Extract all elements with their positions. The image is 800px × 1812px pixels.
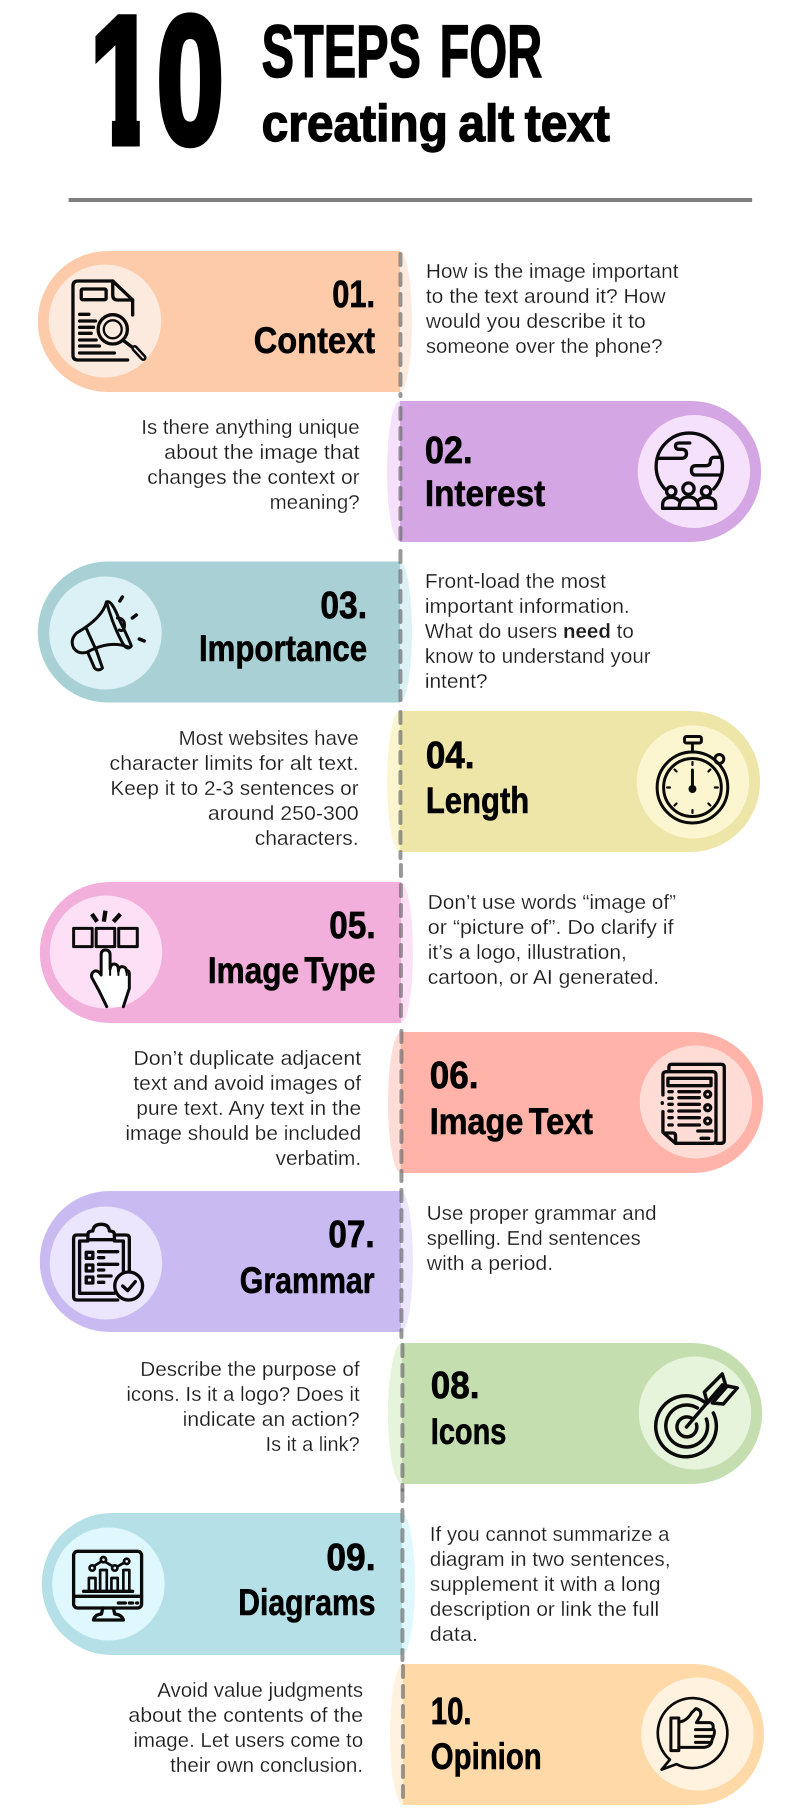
description: 03: What do users need to — [425, 621, 634, 643]
description: 02: Is there anything unique — [141, 417, 360, 439]
description: 06: pure text. Any text in the — [136, 1098, 361, 1120]
description: 07: with a period. — [426, 1253, 553, 1275]
description: 03: intent? — [425, 671, 488, 693]
panel: step 01 Context — [38, 251, 679, 392]
number: 02: 02. — [425, 430, 473, 472]
description: 09 — [430, 1524, 671, 1646]
description: 04 — [109, 728, 359, 850]
icon: stopwatch — [657, 736, 728, 823]
pill: 06 — [401, 1032, 763, 1173]
description: 05 — [428, 892, 676, 989]
panel: step 08 Icons — [126, 1343, 762, 1484]
panel: step 05 Image Type — [40, 882, 676, 1023]
icon: monitor with chart — [74, 1551, 142, 1620]
heading: Diagrams: Diagrams — [238, 1582, 376, 1623]
description: 06: text and avoid images of — [133, 1073, 362, 1095]
description: 02: about the image that — [164, 442, 360, 464]
icon badge: 10 — [641, 1678, 754, 1790]
description: 10: about the contents of the — [128, 1705, 363, 1727]
pill: 05 — [40, 882, 401, 1023]
timeline: dashed centre line — [400, 254, 403, 1802]
pill edge: 06 — [388, 1032, 414, 1173]
description: 02: meaning? — [270, 492, 360, 514]
icon: target and arrow — [656, 1374, 737, 1457]
number: 04: 04. — [426, 735, 475, 777]
description: 05: Don’t use words “image of” — [428, 892, 676, 914]
panel: step 07 Grammar — [40, 1191, 657, 1332]
icon badge: 09 — [52, 1528, 165, 1640]
description: 08 — [126, 1359, 360, 1456]
icon: thumbs up speech bubble — [658, 1698, 727, 1770]
pill edge: 07 — [389, 1191, 413, 1332]
icon badge: 05 — [50, 896, 162, 1008]
heading: Image Type: Image Type — [208, 950, 376, 991]
number: 05: 05. — [329, 905, 376, 947]
description: 03: important information. — [425, 596, 630, 618]
pill edge: 10 — [390, 1664, 416, 1805]
description: 01: to the text around it? How — [426, 286, 666, 308]
icon badge: 06 — [640, 1046, 752, 1158]
heading: Importance: Importance — [199, 628, 367, 669]
description: 07: Use proper grammar and — [427, 1203, 657, 1225]
pill edge: 02 — [387, 401, 413, 542]
heading: Grammar: Grammar — [240, 1260, 375, 1301]
heading: Length: Length — [426, 780, 529, 821]
description: 04: characters. — [255, 828, 359, 850]
description: 06 — [125, 1048, 362, 1170]
heading: Context: Context — [254, 320, 375, 361]
description: 08: Describe the purpose of — [140, 1359, 360, 1381]
description: 09: description or link the full — [430, 1599, 659, 1621]
icon: clipboard with check — [74, 1224, 143, 1300]
description: 06: image should be included — [125, 1123, 361, 1145]
pill: 04 — [400, 711, 760, 852]
panel: step 10 Opinion — [128, 1664, 764, 1805]
icon badge: 04 — [637, 726, 749, 838]
description: 01: would you describe it to — [425, 311, 646, 333]
description: 07: spelling. End sentences — [427, 1228, 641, 1250]
description: 10 — [128, 1680, 363, 1777]
description: 10: Avoid value judgments — [157, 1680, 363, 1702]
pill: 02 — [400, 401, 761, 542]
panel: step 09 Diagrams — [42, 1513, 671, 1655]
title — [84, 0, 610, 182]
description: 10: their own conclusion. — [170, 1755, 363, 1777]
number: 06: 06. — [430, 1055, 479, 1097]
panel: step 03 Importance — [38, 562, 651, 702]
panel: step 06 Image Text — [125, 1032, 763, 1173]
description: 06: verbatim. — [276, 1148, 361, 1170]
description: 07 — [426, 1203, 657, 1275]
icon: stacked documents — [662, 1064, 724, 1143]
icon badge: 08 — [639, 1356, 751, 1470]
description: 09: data. — [430, 1624, 478, 1646]
description: 01: How is the image important — [426, 261, 679, 283]
pill edge: 03 — [388, 562, 412, 702]
description: 10: image. Let users come to — [133, 1730, 363, 1752]
title line: creating alt text: creating alt text — [262, 94, 610, 152]
description: 06: Don’t duplicate adjacent — [133, 1048, 362, 1070]
description: 08: indicate an action? — [183, 1409, 360, 1431]
icon badge: 01 — [49, 264, 161, 378]
panel: step 04 Length — [109, 711, 760, 852]
description: 04: Keep it to 2-3 sentences or — [110, 778, 359, 800]
description: 09: diagram in two sentences, — [430, 1549, 671, 1571]
pill edge: 05 — [389, 882, 413, 1023]
icon: globe and audience — [656, 433, 722, 508]
icon badge: 02 — [638, 415, 750, 528]
heading: Interest: Interest — [425, 473, 545, 514]
pill: 08 — [402, 1343, 762, 1484]
description: 05: or “picture of”. Do clarify if — [428, 917, 674, 939]
pill: 01 — [38, 251, 400, 392]
description: 09: supplement it with a long — [430, 1574, 661, 1596]
description: 02 — [141, 417, 360, 514]
description: 08: icons. Is it a logo? Does it — [126, 1384, 360, 1406]
description: 03: know to understand your — [425, 646, 651, 668]
description: 01: someone over the phone? — [426, 336, 663, 358]
icon: pointing hand and squares — [74, 911, 137, 1007]
pill: 03 — [38, 562, 400, 702]
pill edge: 09 — [389, 1513, 415, 1655]
pill: 07 — [40, 1191, 401, 1332]
description: 09: If you cannot summarize a — [430, 1524, 670, 1546]
description: 05: cartoon, or AI generated. — [428, 967, 659, 989]
heading: Opinion: Opinion — [431, 1736, 542, 1777]
description: 05: it’s a logo, illustration, — [428, 942, 627, 964]
title line: STEPS FOR: STEPS FOR — [262, 10, 542, 93]
icon badge: 03 — [49, 576, 162, 690]
icon badge: 07 — [50, 1206, 162, 1320]
description: 02: changes the context or — [147, 467, 360, 489]
pill edge: 08 — [388, 1343, 416, 1484]
description: 08: Is it a link? — [266, 1434, 360, 1456]
pill: 09 — [42, 1513, 402, 1655]
number: 09: 09. — [326, 1537, 376, 1579]
pill edge: 04 — [387, 711, 413, 852]
panel: step 02 Interest — [141, 401, 761, 542]
description: 03 — [425, 571, 651, 693]
icon: document with magnifier — [73, 281, 143, 360]
description: 04: around 250-300 — [208, 803, 359, 825]
icon: megaphone — [72, 597, 144, 670]
number: 08: 08. — [431, 1365, 480, 1407]
number: 03: 03. — [320, 585, 367, 627]
heading: Image Text: Image Text — [430, 1101, 593, 1142]
number: 10: 10. — [431, 1691, 472, 1733]
pill: 10 — [403, 1664, 764, 1805]
heading: Icons: Icons — [431, 1411, 506, 1452]
description: 03: Front-load the most — [425, 571, 606, 593]
pill edge: 01 — [388, 251, 412, 392]
number: 07: 07. — [328, 1214, 375, 1256]
description: 04: character limits for alt text. — [109, 753, 359, 775]
description: 04: Most websites have — [179, 728, 359, 750]
description: 01 — [425, 261, 679, 358]
number: 01: 01. — [332, 274, 375, 316]
